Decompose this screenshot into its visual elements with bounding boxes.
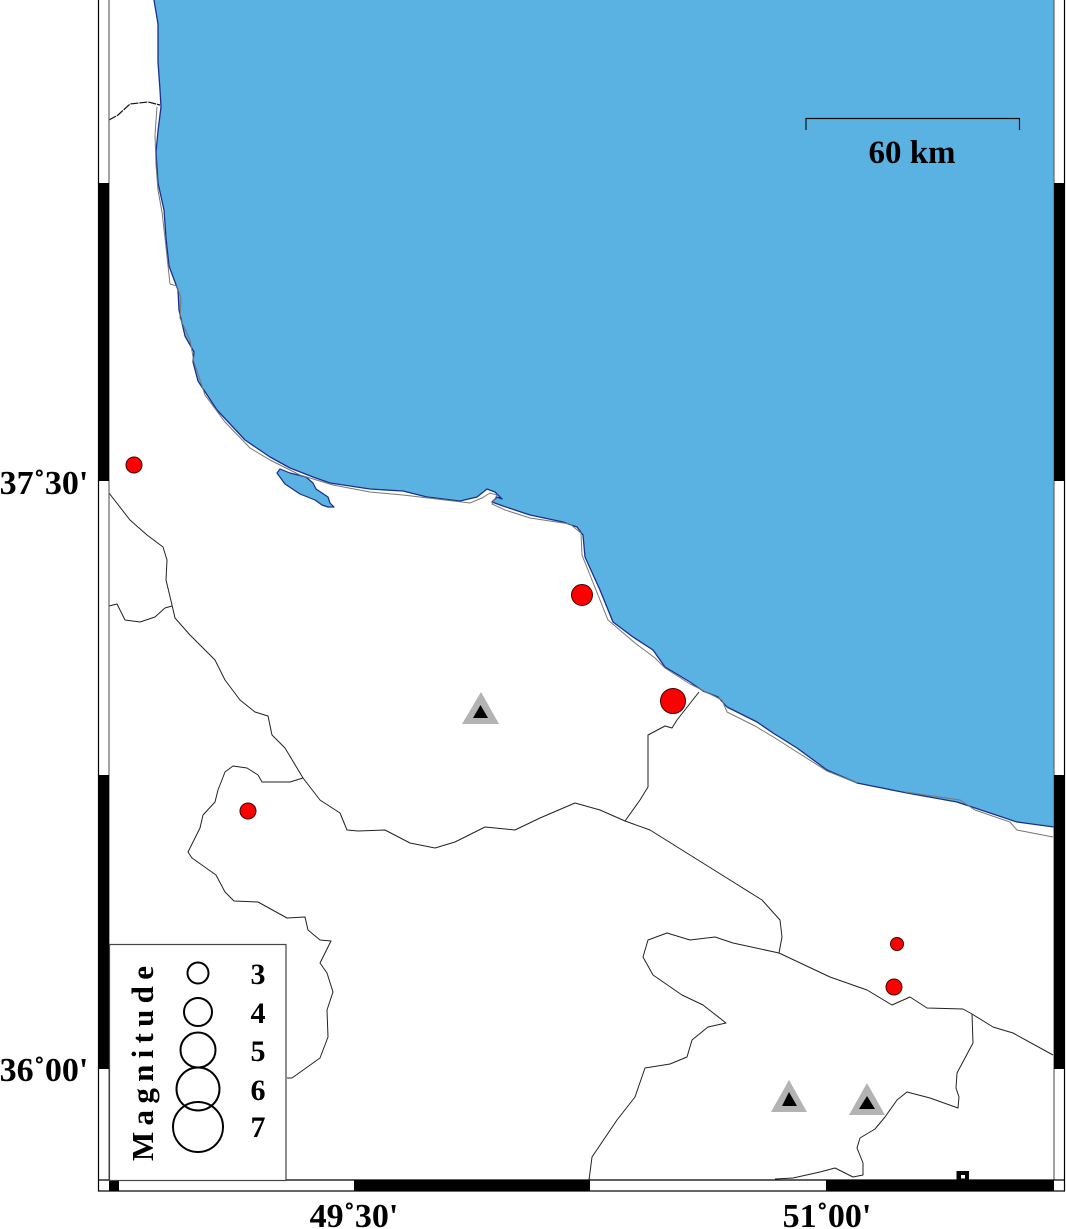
borders: provincial lines (109, 493, 1053, 1180)
sea: Caspian Sea (154, 0, 1054, 827)
station triangle 3 (849, 1083, 885, 1115)
axis labels (0, 465, 871, 1229)
legend numbers: 3 (250, 958, 266, 991)
coastline: dark blue edge of sea (154, 0, 1054, 827)
small square icon on frame (956, 1171, 969, 1180)
shoreline: grey coast outline (155, 107, 1053, 837)
legend circles (173, 962, 223, 1152)
axis labels: 37˚30' (0, 465, 88, 502)
legend title: Magnitude (125, 966, 160, 1161)
border: dashed northern frontier (109, 102, 160, 120)
earthquake markers (126, 457, 904, 995)
legend numbers (250, 958, 266, 1144)
legend numbers: 5 (250, 1035, 266, 1068)
legend numbers: 7 (250, 1111, 266, 1144)
lake: lagoon (277, 469, 334, 507)
scale bar (806, 118, 1020, 171)
station triangle 2 (771, 1080, 807, 1112)
axis labels: 36˚00' (0, 1052, 88, 1089)
legend numbers: 6 (250, 1074, 266, 1107)
scale bar: 60 km (868, 135, 956, 171)
station triangle 1 (462, 692, 499, 724)
legend: magnitude (110, 944, 286, 1180)
legend numbers: 4 (250, 997, 266, 1030)
